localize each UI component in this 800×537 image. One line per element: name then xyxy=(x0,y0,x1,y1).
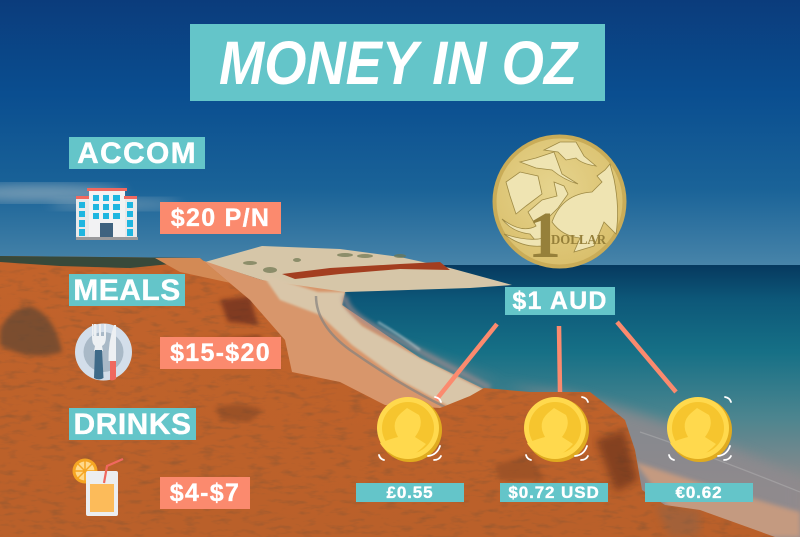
coin lettering xyxy=(528,199,607,272)
icon: hotel building xyxy=(76,188,138,240)
price: accommodation: $20 P/N xyxy=(171,204,270,232)
icon: one dollar coin xyxy=(492,134,626,269)
heading: accommodation: ACCOM xyxy=(77,137,197,170)
price: drinks: $4-$7 xyxy=(170,479,240,507)
heading: meals: MEALS xyxy=(73,274,181,307)
far dune xyxy=(205,246,512,296)
heading: drinks: DRINKS xyxy=(73,408,192,441)
label: pound value: £0.55 xyxy=(386,483,434,502)
label: pound value xyxy=(356,483,464,502)
heading: one dollar AUD: $1 AUD xyxy=(512,287,608,315)
label: US dollar value: $0.72 USD xyxy=(508,483,600,502)
shore wash xyxy=(400,345,800,537)
foreground land xyxy=(0,256,775,537)
icon: juice glass with orange slice xyxy=(72,458,124,516)
coin: euro xyxy=(667,396,732,462)
label: euro value: €0.62 xyxy=(675,483,723,502)
coin: pound xyxy=(377,396,442,462)
coin: US dollar xyxy=(524,396,589,462)
price: meals: $15-$20 xyxy=(170,339,271,367)
price: drinks xyxy=(160,477,250,509)
icon: plate with fork and knife xyxy=(75,324,132,380)
coin lettering: DOLLAR xyxy=(551,233,607,248)
label: euro value xyxy=(645,483,753,502)
main beach xyxy=(195,258,490,414)
